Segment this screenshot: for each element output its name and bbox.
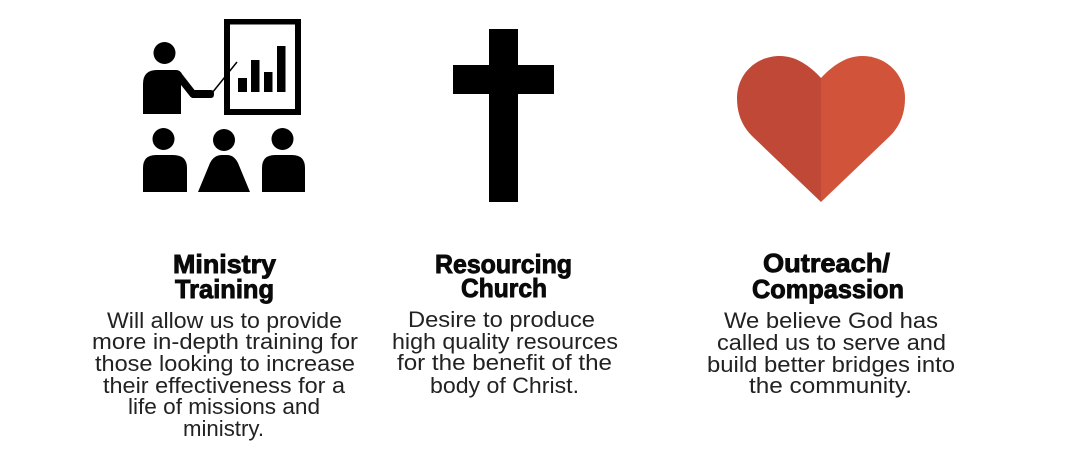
heading: Outreach/Compassion: Outreach/ [763,248,890,278]
text block: Ministry Training description: those looking to increase [95,351,355,376]
heart left half [737,56,821,202]
text block: Resourcing Church description: high quality resources [392,329,618,354]
text block: Outreach/Compassion description: the community. [749,373,912,398]
heading: Resourcing Church: Resourcing [435,249,572,279]
text block: Outreach/Compassion description: called us to serve and [717,330,946,355]
text block: Resourcing Church description [392,307,618,398]
audience figure left [143,128,187,192]
icon: heart [737,56,905,202]
icon: cross [453,29,554,202]
text block: Outreach/Compassion description [707,308,955,398]
text block: Ministry Training description: life of missions and [128,394,320,419]
heading: Ministry Training: Ministry [173,249,277,279]
heading: Resourcing Church: Church [461,273,547,303]
heading: Outreach/Compassion [752,248,904,304]
text block: Resourcing Church description: Desire to produce [408,307,595,332]
text block: Resourcing Church description: body of Christ. [430,373,579,398]
text block: Ministry Training description: more in-depth training for [92,329,359,354]
heading: Outreach/Compassion: Compassion [752,274,904,304]
heart right half [821,56,905,202]
text block: Ministry Training description: their effectiveness for a [103,373,345,398]
text block: Outreach/Compassion description: We believe God has [724,308,938,333]
presenter figure with pointer [143,42,237,114]
text block: Ministry Training description [92,308,359,441]
audience figure centre [198,129,250,192]
text block: Ministry Training description: ministry. [183,416,264,441]
text block: Outreach/Compassion description: build better bridges into [707,352,955,377]
text block: Resourcing Church description: for the benefit of the [397,350,612,375]
heading: Ministry Training: Training [175,274,274,304]
audience figure right [262,128,305,192]
presentation board with bar chart [224,19,301,115]
heading: Resourcing Church [435,249,572,303]
text block: Ministry Training description: Will allow us to provide [107,308,342,333]
icon: presenter with chart and audience [143,19,305,192]
heading: Ministry Training [173,249,277,304]
